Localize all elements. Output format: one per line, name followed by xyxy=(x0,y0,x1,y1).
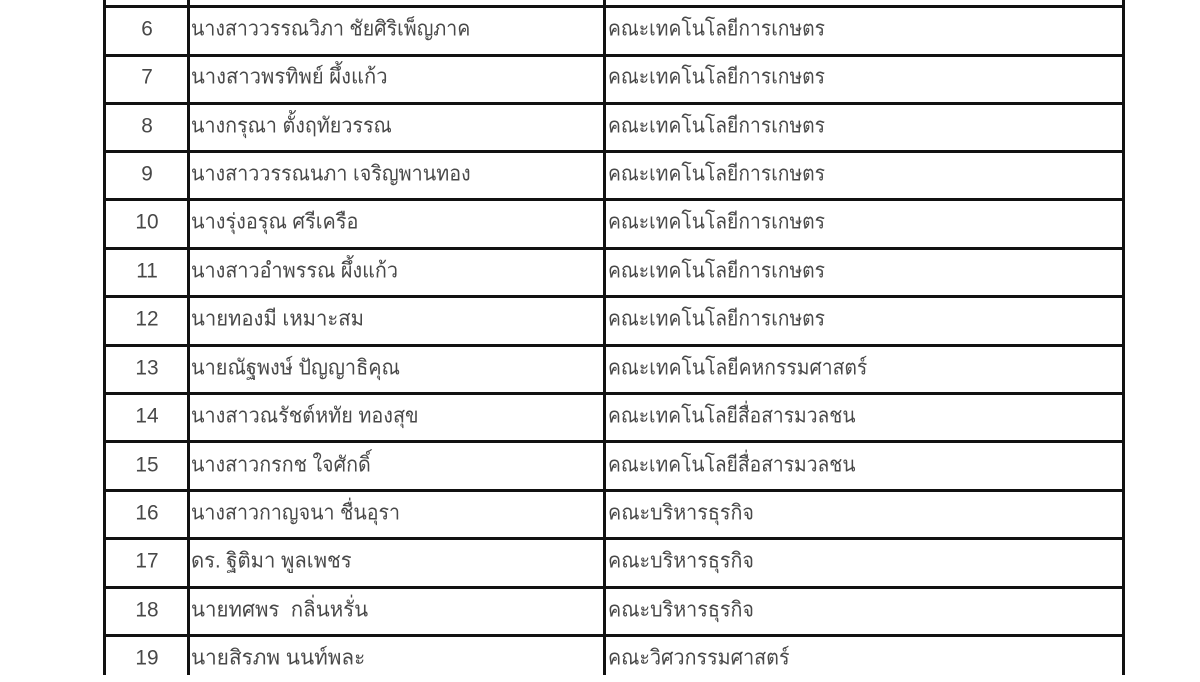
row 15 xyxy=(135,449,856,477)
row 11 xyxy=(136,255,825,283)
row 8: คณะเทคโนโลยีการเกษตร xyxy=(608,114,825,138)
row 6 xyxy=(141,16,825,41)
row 14: คณะเทคโนโลยีสื่อสารมวลชน xyxy=(608,404,855,428)
row 18: นายทศพร กลิ่นหรั่น xyxy=(191,598,368,622)
row 10: คณะเทคโนโลยีการเกษตร xyxy=(608,210,825,234)
row 9: นางสาววรรณนภา เจริญพานทอง xyxy=(191,162,471,186)
row 13 xyxy=(135,356,867,380)
row 17: คณะบริหารธุรกิจ xyxy=(608,549,754,573)
row 9 xyxy=(141,162,825,186)
row 19: นายสิรภพ นนท์พละ xyxy=(191,646,365,670)
row 10 xyxy=(135,210,825,234)
row 19 xyxy=(135,646,790,670)
row 14: 14 xyxy=(135,404,159,428)
row 18 xyxy=(135,594,754,622)
row 10: นางรุ่งอรุณ ศรีเครือ xyxy=(191,210,358,234)
row 19: คณะวิศวกรรมศาสตร์ xyxy=(608,646,790,670)
row 15: นางสาวกรกช ใจศักดิ์ xyxy=(191,453,371,477)
row 17 xyxy=(135,549,754,574)
row 6: คณะเทคโนโลยีการเกษตร xyxy=(608,17,825,41)
row 7: 7 xyxy=(141,65,153,89)
row 9: 9 xyxy=(141,162,153,186)
row 14: นางสาวณรัชต์หทัย ทองสุข xyxy=(191,404,419,428)
row 8 xyxy=(141,110,825,138)
row 16: 16 xyxy=(135,501,159,525)
row 6: นางสาววรรณวิภา ชัยศิริเพ็ญภาค xyxy=(191,17,470,41)
row 16: คณะบริหารธุรกิจ xyxy=(608,501,754,525)
row 11: 11 xyxy=(136,259,158,283)
row 7: นางสาวพรทิพย์ ผึ้งแก้ว xyxy=(191,65,388,89)
row 11: คณะเทคโนโลยีการเกษตร xyxy=(608,259,825,283)
row 8: 8 xyxy=(141,114,153,138)
row 18: 18 xyxy=(135,598,159,622)
row 7 xyxy=(141,61,825,89)
row 19: 19 xyxy=(135,646,159,670)
row 12: คณะเทคโนโลยีการเกษตร xyxy=(608,307,825,331)
row 15: คณะเทคโนโลยีสื่อสารมวลชน xyxy=(608,453,855,477)
row 7: คณะเทคโนโลยีการเกษตร xyxy=(608,65,825,89)
row 17: ดร. ฐิติมา พูลเพชร xyxy=(191,549,352,573)
row 12: นายทองมี เหมาะสม xyxy=(191,307,364,331)
row 8: นางกรุณา ตั้งฤทัยวรรณ xyxy=(191,114,392,138)
row 13: 13 xyxy=(135,356,159,380)
row 12 xyxy=(135,306,825,331)
row 13: นายณัฐพงษ์ ปัญญาธิคุณ xyxy=(191,356,400,380)
row 6: 6 xyxy=(141,17,153,41)
row 9: คณะเทคโนโลยีการเกษตร xyxy=(608,162,825,186)
row 17: 17 xyxy=(135,549,159,573)
row 13: คณะเทคโนโลยีคหกรรมศาสตร์ xyxy=(608,356,867,380)
row 18: คณะบริหารธุรกิจ xyxy=(608,598,754,622)
row 16: นางสาวกาญจนา ชื่นอุรา xyxy=(191,501,400,525)
row 11: นางสาวอำพรรณ ผึ้งแก้ว xyxy=(191,259,398,283)
row 15: 15 xyxy=(135,453,159,477)
row 16 xyxy=(135,498,754,526)
row 14 xyxy=(135,400,856,428)
row 10: 10 xyxy=(135,210,159,234)
row 12: 12 xyxy=(135,307,159,331)
